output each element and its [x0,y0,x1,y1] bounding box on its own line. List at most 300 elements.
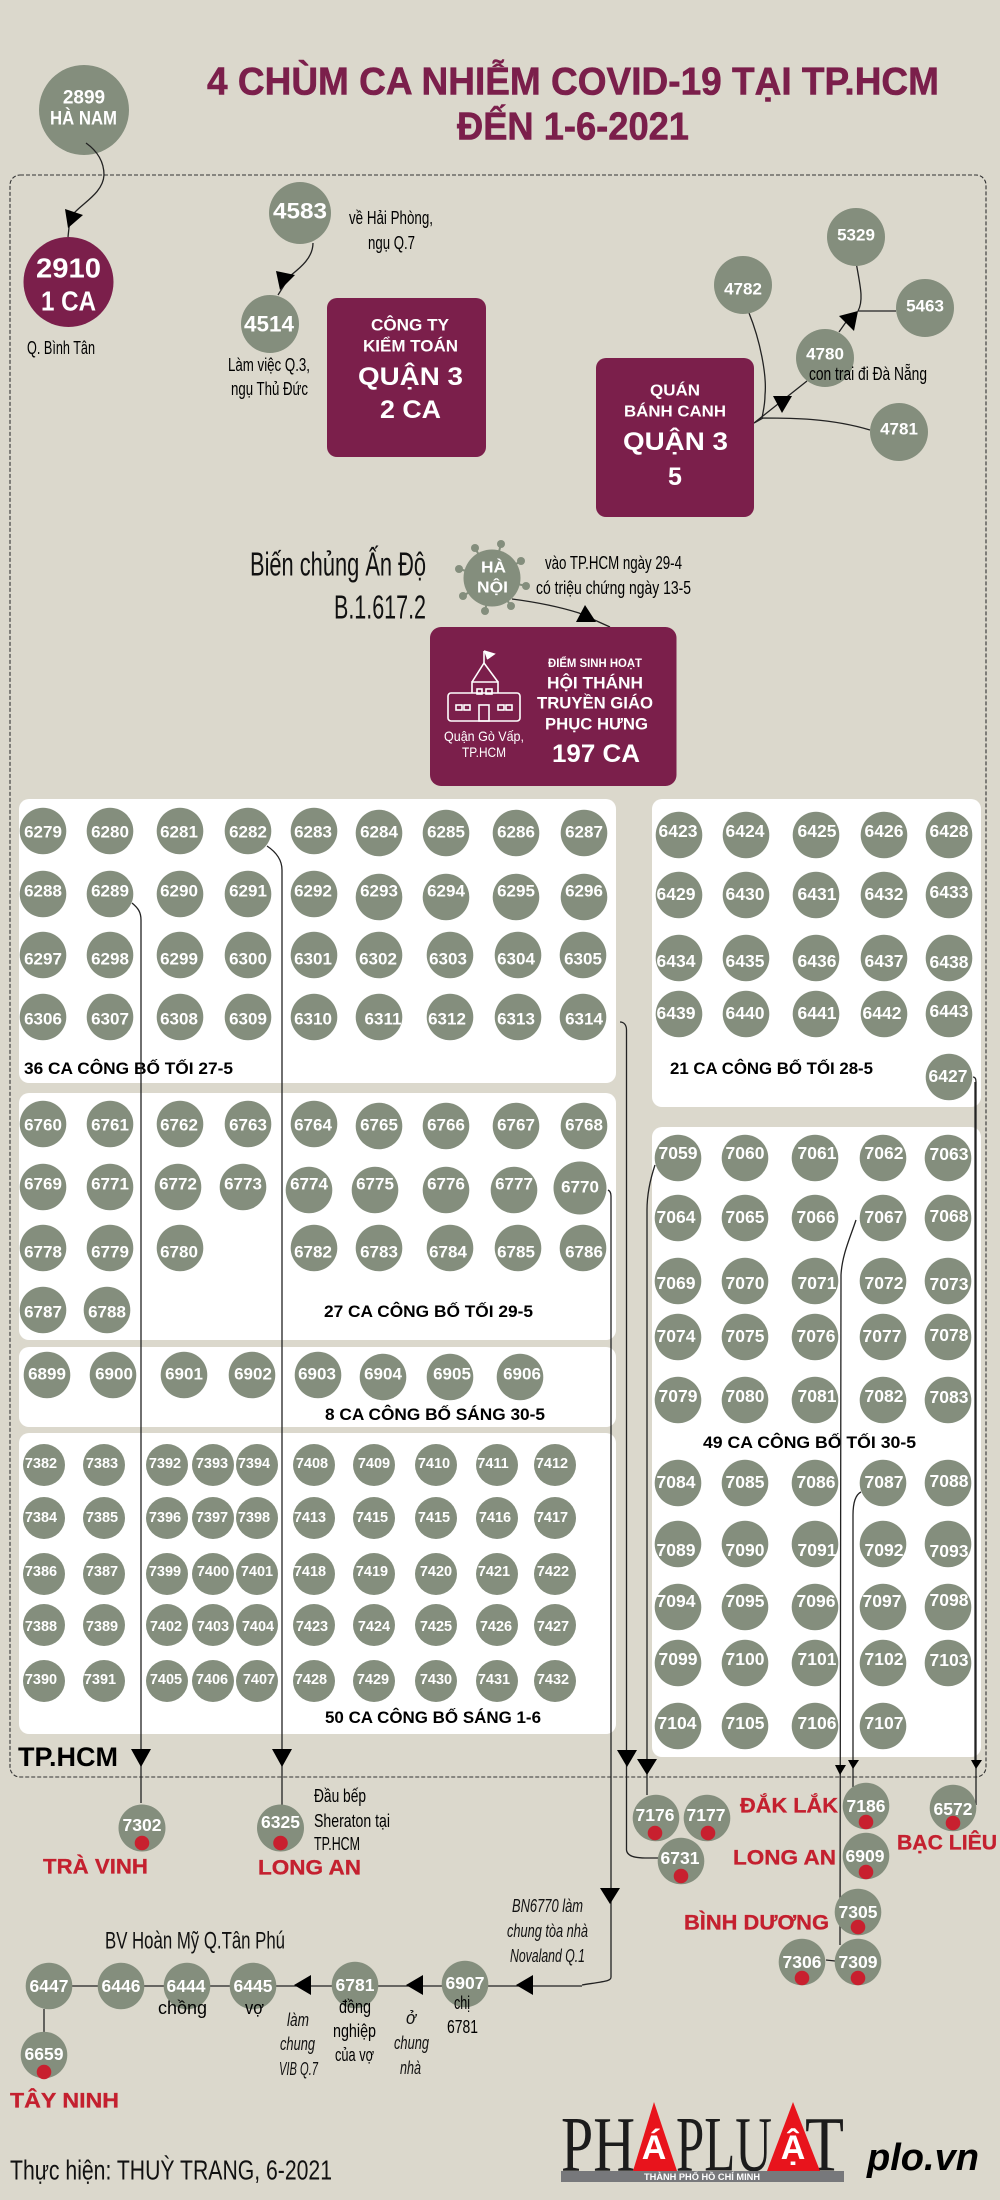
case 5463: 5463 [906,296,944,316]
panel: 27 ca công bố tối 29-5 [19,1093,616,1340]
row 2: 6293 [360,882,398,900]
heading: BV Hoàn Mỹ: BV Hoàn Mỹ Q.Tân Phú [105,1928,285,1954]
row 1: 6284 [360,822,398,842]
case 5329 [827,208,885,266]
row 1: 6287 [565,822,603,842]
row 8: 7094 [657,1591,696,1611]
arrows on link lines [131,1749,982,1995]
row 3: 6305 [564,950,602,968]
case 6909 [843,1833,889,1879]
row 3 [20,1225,606,1271]
case 2899 Hà Nam: HÀ NAM [50,108,117,130]
case 6909: 6909 [846,1846,885,1866]
case row: 6899 [28,1364,66,1384]
row 6: 7086 [797,1472,836,1492]
row 4: 7389 [86,1619,118,1635]
panel label: 49 CA CÔNG BỐ TỐI 30-5 [703,1432,916,1452]
row 2: 7397 [196,1510,228,1526]
row 1: 7394 [238,1456,270,1472]
row 10: 7107 [865,1713,903,1733]
row 4: 7423 [296,1619,328,1635]
row 2: 7398 [238,1510,270,1526]
row 1 [20,1101,607,1149]
panel label: 27 CA CÔNG BỐ TỐI 29-5 [324,1301,533,1321]
arrow: 4583 to 4514 [276,243,313,295]
note: đồng nghiệp của vợ [333,1997,376,2065]
row 4: 6312 [428,1010,466,1028]
row 10: 7104 [658,1713,697,1733]
panel: 49 ca công bố tối 30-5 [652,1127,981,1757]
note: chị 6781 [447,1993,478,2037]
row 1: 6767 [497,1116,535,1134]
row 4: 7078 [930,1325,969,1345]
row 1: 7409 [358,1456,390,1472]
row 1: 6425 [798,821,837,841]
row 3: 6784 [429,1242,467,1262]
note: đầu bếp Sheraton: TP.HCM [314,1834,360,1854]
row 5: 7407 [243,1672,275,1688]
row 1: 6428 [930,821,969,841]
note: con trai đi Đà Nẵng: con trai đi Đà Nẵng [809,364,927,384]
case 4514 [241,295,299,353]
row 2: 6289 [91,882,129,900]
row 3: 7070 [726,1273,765,1293]
row 3 [20,932,606,978]
panel: quán bánh canh: QUẬN 3 [623,426,728,456]
case 4782 [714,256,772,314]
row 2: 6295 [497,882,535,900]
row 5: 7431 [478,1672,510,1688]
case 7176 [633,1795,679,1841]
note: 4583: ngụ Q.7 [368,233,415,253]
credit: Thực hiện: THUỲ TRANG, 6-2021 [10,2154,332,2186]
case 7305: 7305 [839,1902,878,1922]
heading: biến chủng Ấn Độ: Biến chủng Ấn Độ [250,546,426,582]
panel: hội thánh truyền giáo phục hưng: TRUYỀN GIÁO [537,694,653,712]
row 2: 6292 [294,882,332,900]
row 3: 7421 [478,1564,510,1580]
row 1: 7063 [930,1144,969,1164]
row 3: 6298 [91,950,129,968]
row 3: 6778 [24,1242,62,1262]
row 8: 7095 [726,1591,765,1611]
case 6445 [230,1963,276,2009]
row 4: 7424 [358,1619,390,1635]
row 3: 7400 [197,1564,229,1580]
case 6444: 6444 [167,1976,206,1996]
row 3 [23,1553,576,1595]
row 1: 6279 [24,822,62,842]
note: đầu bếp Sheraton: Sheraton tại [314,1811,390,1831]
row 1: 7412 [536,1456,568,1472]
case 6427: 6427 [929,1066,967,1086]
row 1: 6762 [160,1116,198,1134]
panel: 50 ca công bố sáng 1-6 [19,1433,616,1734]
note: làm chung VIB: làm [287,2010,309,2030]
note: ở chung nhà: nhà [400,2058,421,2078]
row 3: 6435 [726,951,765,971]
case 2899 Hà Nam [39,65,129,155]
panel: hội thánh truyền giáo phục hưng: PHỤC HƯNG [545,714,648,734]
row 5: 7428 [295,1672,327,1688]
case 4781 [870,403,928,461]
row 6: 7087 [865,1472,903,1492]
row 3: 6437 [865,951,903,971]
row 6 [655,1460,971,1506]
row 8: 7098 [930,1590,969,1610]
row 2: 6775 [356,1174,394,1194]
case 7186 [843,1783,889,1829]
case 6427 [926,1054,972,1100]
case 4782: 4782 [724,280,762,298]
row 1 [656,812,972,858]
row 4 [656,991,972,1037]
row 2: 6294 [427,882,465,900]
label: TP.HCM: TP.HCM [18,1742,118,1772]
row 3: 6779 [91,1242,129,1262]
case 7302 Trà Vinh [118,1804,166,1852]
case row: 6902 [234,1364,272,1384]
row 3: 6302 [359,950,397,968]
row 4: 6306 [24,1010,62,1028]
panel: hội thánh truyền giáo phục hưng: HỘI THÁNH [547,674,643,692]
case row [24,1352,543,1400]
case 7176: 7176 [636,1805,675,1825]
logo: plo.vn: plo.vn [866,2137,979,2179]
row 3: 7386 [25,1564,57,1580]
row 4: 7075 [726,1326,765,1346]
title [207,60,939,148]
row 1: 7060 [726,1143,765,1163]
row 1: 6426 [865,821,904,841]
case 7302 Trà Vinh: 7302 [123,1815,162,1835]
row 5: 7429 [357,1672,389,1688]
panel: 8 ca công bố sáng 30-5 [19,1347,616,1427]
case 6446 [98,1963,144,2009]
row 5: 7081 [798,1386,837,1406]
panel label: 21 CA CÔNG BỐ TỐI 28-5 [670,1058,873,1078]
row 4: 7404 [242,1619,274,1635]
note: làm chung VIB [279,2010,319,2079]
row 1: 7059 [659,1143,698,1163]
icon: virus Hà Nội: HÀ [481,558,506,576]
case 7177 [684,1795,730,1841]
row 4: 7403 [197,1619,229,1635]
row 2: 6296 [565,882,603,900]
panel: công ty kiểm toán: KIỂM TOÁN [363,336,458,356]
row 4: 6439 [657,1003,696,1023]
row 2: 6773 [224,1174,262,1194]
case 4514: 4514 [244,312,295,336]
row 9: 7102 [865,1649,904,1669]
row 3: 6780 [160,1242,198,1262]
row 4: 6443 [930,1001,969,1021]
panel: công ty kiểm toán: 2 CA [380,396,441,424]
case 4781: 4781 [880,420,918,438]
note: 4514 [228,355,310,399]
row 2: 6774 [290,1174,328,1194]
row 1: 6280 [91,822,129,842]
row 2: 6777 [495,1174,533,1194]
row 2: 6430 [726,884,765,904]
case 7305 [835,1889,881,1935]
row 2 [656,872,972,918]
case row: 6904 [364,1364,402,1384]
panel: hội thánh truyền giáo phục hưng: Quận Gò Vấp, [444,728,524,744]
row 1: 6760 [24,1116,62,1134]
row 1: 6768 [565,1116,603,1134]
row 4: 6313 [497,1010,535,1028]
row 1: 7393 [196,1456,228,1472]
note: ở chung nhà: chung [394,2033,429,2053]
row 1: 6282 [229,822,267,842]
link lines from clusters to provinces [44,846,976,2032]
row 4: 6314 [565,1010,603,1028]
note: đồng nghiệp của vợ: đồng [339,1997,371,2017]
note: ở chung nhà: ở [406,2008,418,2028]
icon: virus Hà Nội [455,540,530,615]
note: 4514: ngụ Thủ Đức [231,379,308,399]
row 9 [655,1640,971,1686]
row 3: 7401 [241,1564,273,1580]
row 3: 7399 [149,1564,181,1580]
label: Tây Ninh: TÂY NINH [10,2088,119,2112]
row 1: 6761 [91,1116,129,1134]
note: chồng: chồng [158,1998,207,2018]
label: Long An: LONG AN [733,1846,836,1870]
row 3: 6785 [497,1242,535,1262]
row 5: 7390 [25,1672,57,1688]
case row: 6905 [433,1364,471,1384]
case 2910 [24,237,114,327]
case 4583: 4583 [273,198,327,224]
row 1 [655,1135,971,1181]
row 2 [655,1195,971,1241]
row 4: 6308 [160,1010,198,1028]
row 5: 7079 [659,1386,698,1406]
row 7: 7093 [930,1541,969,1561]
case 6325 Long An [257,1804,304,1852]
row 3: 7420 [420,1564,452,1580]
note: ở chung nhà [394,2008,429,2078]
row 4: 6310 [294,1010,332,1028]
case 7186: 7186 [847,1796,886,1816]
row 1: 6423 [659,821,698,841]
case 7306: 7306 [783,1952,822,1972]
row 4: 7426 [480,1619,512,1635]
row 2: 6772 [159,1174,197,1194]
case 5329: 5329 [837,226,875,244]
case 6444 [164,1963,210,2009]
note: đầu bếp Sheraton: Đầu bếp [314,1786,366,1806]
case row: 6903 [298,1364,336,1384]
row 3: 7418 [294,1564,326,1580]
note: Hà Nội dates: có triệu chứng ngày 13-5 [536,578,691,598]
case 6447: 6447 [30,1976,68,1996]
row 4: 7427 [537,1619,569,1635]
panel label: 36 CA CÔNG BỐ TỐI 27-5 [24,1058,233,1078]
row 9: 7099 [659,1649,698,1669]
row 9: 7100 [726,1649,765,1669]
case 7309: 7309 [839,1952,878,1972]
row 2: 7066 [797,1207,836,1227]
case 2899 Hà Nam: 2899 [63,88,105,108]
label: Bình Dương: BÌNH DƯƠNG [684,1912,829,1934]
row 5: 7082 [865,1386,904,1406]
row 5: 7406 [196,1672,228,1688]
row 3 [656,935,972,981]
label: Bạc Liêu: BẠC LIÊU [897,1830,997,1854]
logo: Pháp Luật: Ậ [781,2129,805,2167]
note: Hà Nội dates: vào TP.HCM ngày 29-4 [545,553,682,573]
logo: Pháp Luật: PH [561,2100,635,2188]
row 5 [23,1660,576,1702]
row 3: 6300 [229,950,267,968]
case 7306 [779,1939,825,1985]
label: Trà Vinh: TRÀ VINH [43,1856,148,1878]
TP.HCM dashed boundary [10,175,986,1777]
row 4: 7077 [863,1326,901,1346]
row 4: 6307 [91,1010,129,1028]
row 2: 6432 [865,884,904,904]
row 3: 6436 [798,951,837,971]
panel label: 50 CA CÔNG BỐ SÁNG 1-6 [325,1707,541,1727]
note: Hà Nội dates [536,553,691,598]
note: vợ: vợ [245,1998,264,2018]
case 6445: 6445 [234,1976,273,1996]
row 2: 6291 [229,882,267,900]
row 10 [655,1703,906,1749]
row 2: 7385 [86,1510,118,1526]
case 6781: 6781 [336,1975,375,1995]
case 2910: 1 CA [41,286,96,316]
case 6325 Long An: 6325 [261,1812,300,1832]
arrow: 2899 to 2910 [65,143,104,237]
row 4: 6309 [229,1010,267,1028]
row 10: 7105 [726,1713,765,1733]
note: 4583 [349,208,433,253]
row 6: 7085 [726,1472,765,1492]
row 2: 7416 [479,1510,511,1526]
row 2: 7415 [356,1510,388,1526]
row 3 [655,1258,971,1304]
panel: hội thánh truyền giáo phục hưng [430,627,676,786]
row 1: 7061 [798,1143,837,1163]
case row: 6900 [95,1364,133,1384]
heading: biến chủng Ấn Độ: B.1.617.2 [334,588,426,626]
logo: Pháp Luật [561,2100,844,2188]
row 3: 7422 [537,1564,569,1580]
panel: hội thánh truyền giáo phục hưng: ĐIỂM SINH HOẠT [548,655,643,670]
panel: quán bánh canh: BÁNH CANH [624,402,726,420]
panel: công ty kiểm toán: CÔNG TY [371,316,450,334]
row 4: 6311 [365,1010,401,1028]
row 2: 7413 [294,1510,326,1526]
row 7: 7089 [657,1540,696,1560]
row 1: 7408 [296,1456,328,1472]
row 2: 6770 [561,1178,599,1196]
case 7177: 7177 [687,1805,725,1825]
case 6572 [930,1785,976,1831]
row 8: 7096 [797,1591,836,1611]
row 1: 6424 [726,821,765,841]
title: 4 CHÙM CA NHIỄM COVID-19 TẠI TP.HCM [207,60,939,104]
panel: hội thánh truyền giáo phục hưng: TP.HCM [462,744,506,760]
row 3: 6303 [429,950,467,968]
panel: quán bánh canh: 5 [668,463,682,491]
row 3: 7387 [86,1564,118,1580]
row 3: 6782 [294,1242,332,1262]
row 4 [20,1287,130,1333]
row 5: 7391 [84,1672,116,1688]
row 1: 6766 [427,1116,465,1134]
row 2: 6769 [24,1174,62,1194]
panel label: 8 CA CÔNG BỐ SÁNG 30-5 [325,1404,545,1424]
title: ĐẾN 1-6-2021 [457,104,689,148]
case 2910: 2910 [36,252,101,284]
row 2: 7067 [865,1207,903,1227]
row 8 [655,1584,971,1630]
note: BN6770 [507,1896,588,1966]
case 7309 [835,1939,881,1985]
row 6: 7088 [930,1471,969,1491]
row 2: 7065 [726,1207,765,1227]
case 6907 [442,1961,488,2007]
row 5: 7432 [537,1672,569,1688]
row 4: 7402 [150,1619,182,1635]
row 7: 7092 [865,1540,904,1560]
logo: Pháp Luật: THÀNH PHỐ HỒ CHÍ MINH [644,2171,760,2182]
row 1: 6285 [427,822,465,842]
case 6659 Tây Ninh: 6659 [25,2044,64,2064]
note: BN6770: BN6770 làm [512,1896,583,1916]
row 6: 7084 [657,1472,696,1492]
case 4780 [796,329,854,387]
row 1: 7383 [86,1456,118,1472]
row 7: 7090 [726,1540,765,1560]
row 1: 7062 [865,1143,904,1163]
logo: Pháp Luật: T [805,2100,844,2188]
note: BN6770: chung tòa nhà [507,1921,588,1941]
case 4780: 4780 [806,344,844,364]
note: chị 6781: chị [454,1993,470,2013]
row 4: 7074 [657,1326,696,1346]
case 6781 [332,1962,378,2008]
panel: 21 ca công bố tối 28-5 [652,799,981,1107]
note: 4583: về Hải Phòng, [349,208,433,228]
row 2: 6771 [91,1174,129,1194]
row 1: 7382 [25,1456,57,1472]
case 4583 [269,182,331,244]
case 6731: 6731 [661,1848,700,1868]
row 9: 7101 [798,1649,837,1669]
row 2: 7068 [930,1206,969,1226]
note: đồng nghiệp của vợ: của vợ [335,2045,374,2065]
logo: Pháp Luật: Á [642,2129,666,2167]
row 2: 6776 [427,1174,465,1194]
row 3: 6434 [657,951,696,971]
row 2: 6433 [930,882,969,902]
row 5: 7080 [726,1386,765,1406]
panel: hội thánh truyền giáo phục hưng: 197 CA [552,740,640,768]
panel: 36 ca công bố tối 27-5 [19,799,616,1083]
row 2 [23,1497,576,1539]
row 1: 6764 [294,1116,332,1134]
case 6659 Tây Ninh [21,2032,67,2079]
row 5: 7405 [150,1672,182,1688]
row 3: 6783 [360,1242,398,1262]
row 1: 6765 [360,1116,398,1134]
